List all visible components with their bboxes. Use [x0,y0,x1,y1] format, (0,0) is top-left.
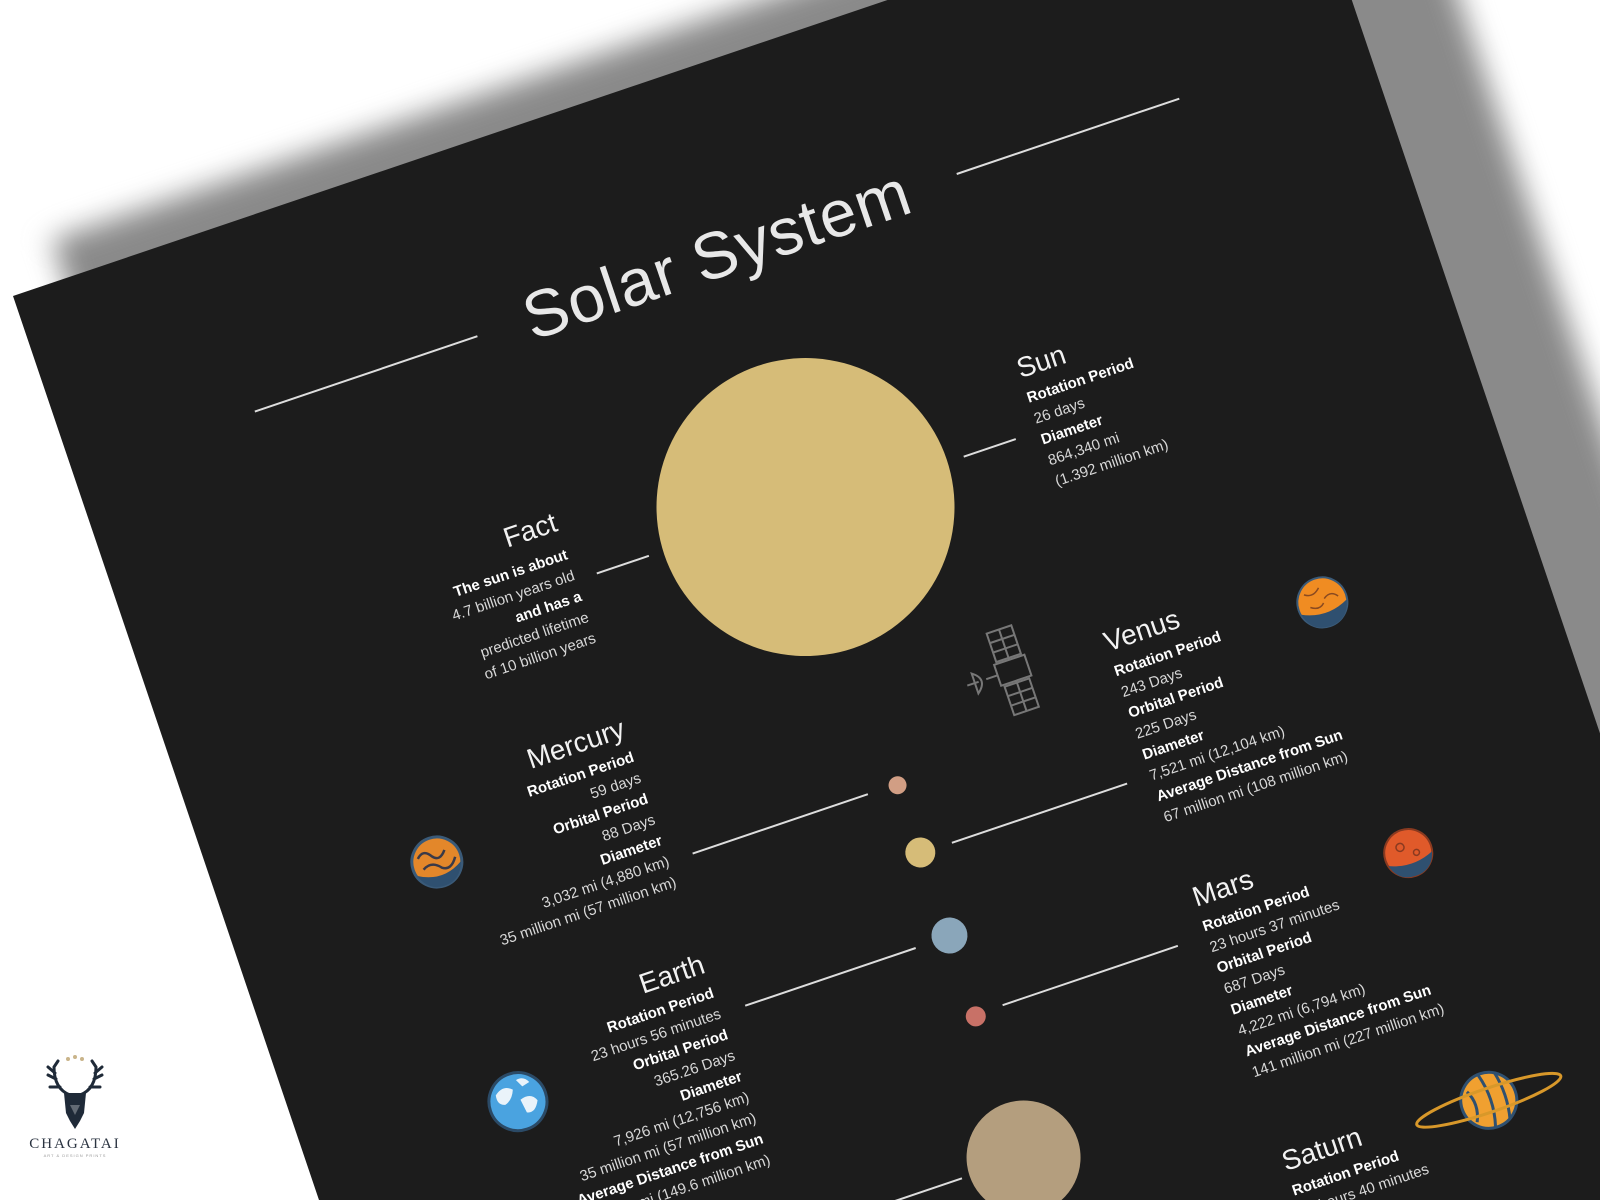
poster: Diameter [1229,982,1295,1019]
poster: 687 Days [1222,961,1287,998]
poster: 225 Days [1133,706,1199,743]
poster: 7,926 mi (12,756 km) [612,1089,751,1150]
poster: 23 hours 37 minutes [1208,896,1342,956]
poster: 35 million mi (57 million km) [578,1110,758,1185]
text: fact: predicted lifetime [478,609,591,661]
icon: venus [1296,576,1348,628]
icon: saturn [1415,1070,1562,1130]
poster: 88 Days [600,811,657,845]
poster: Average Distance from Sun [1243,982,1433,1060]
poster: Orbital Period [631,1026,730,1074]
sun [617,318,994,696]
icon: deer [46,1055,104,1129]
poster: 67 million mi (108 million km) [1161,748,1350,826]
text: sun info [1013,339,1171,490]
text: sun info: Rotation Period [1025,355,1136,407]
poster: Venus [1100,603,1184,657]
logo: ART & DESIGN PRINTS [44,1153,106,1158]
poster: 59 days [588,770,643,803]
text: sun info: 864,340 mi [1046,429,1122,469]
poster: Mercury [523,713,629,775]
poster: Rotation Period [1290,1148,1401,1200]
poster: 141 million mi (227 million km) [1250,1000,1446,1081]
poster: Diameter [1140,727,1207,764]
text: fact [450,507,598,683]
poster: 243 Days [1119,665,1185,701]
text: sun info: 26 days [1032,395,1087,428]
venus [901,833,939,871]
poster: Diameter [678,1068,744,1105]
text: fact: Fact [499,507,561,553]
text: sun info: Diameter [1039,412,1105,448]
text: fact: The sun is about [452,546,570,601]
mars [963,1004,988,1029]
poster: Rotation Period [605,985,716,1037]
poster: 7,521 mi (12,104 km) [1147,723,1287,784]
earth [927,913,972,958]
poster: 35 million mi (57 million km) [498,874,679,949]
icon: satellite [967,624,1040,716]
poster: 3,032 mi (4,880 km) [540,853,672,912]
poster: 365.26 Days [652,1047,737,1090]
text: fact: of 10 billion years [482,630,598,683]
mercury [886,774,909,797]
saturn [951,1085,1096,1200]
poster: Mars [1188,863,1257,913]
brand name: CHAGATAI [29,1136,121,1152]
logo [29,1055,121,1158]
icon: mars [1383,828,1434,878]
poster: Orbital Period [551,791,650,838]
text: fact: 4.7 billion years old [450,567,577,625]
poster: Earth [635,949,708,1000]
poster: Diameter [598,832,664,869]
poster: 4,222 mi (6,794 km) [1236,981,1368,1039]
poster: Rotation Period [525,749,636,801]
poster: Average Distance from Sun [1154,726,1345,805]
icon: earth [487,1071,548,1132]
icon: mercury [410,835,464,889]
poster: Rotation Period [1112,628,1223,680]
poster: Saturn [1278,1121,1366,1177]
title: Solar System [513,154,920,354]
text: fact: and has a [513,588,584,626]
poster: Orbital Period [1215,929,1314,977]
text: sun info: Sun [1013,339,1070,384]
poster: Orbital Period [1126,674,1226,722]
poster: Rotation Period [1200,883,1312,935]
text: sun info: (1.392 million km) [1053,436,1171,490]
poster: 23 hours 56 minutes [589,1006,723,1065]
